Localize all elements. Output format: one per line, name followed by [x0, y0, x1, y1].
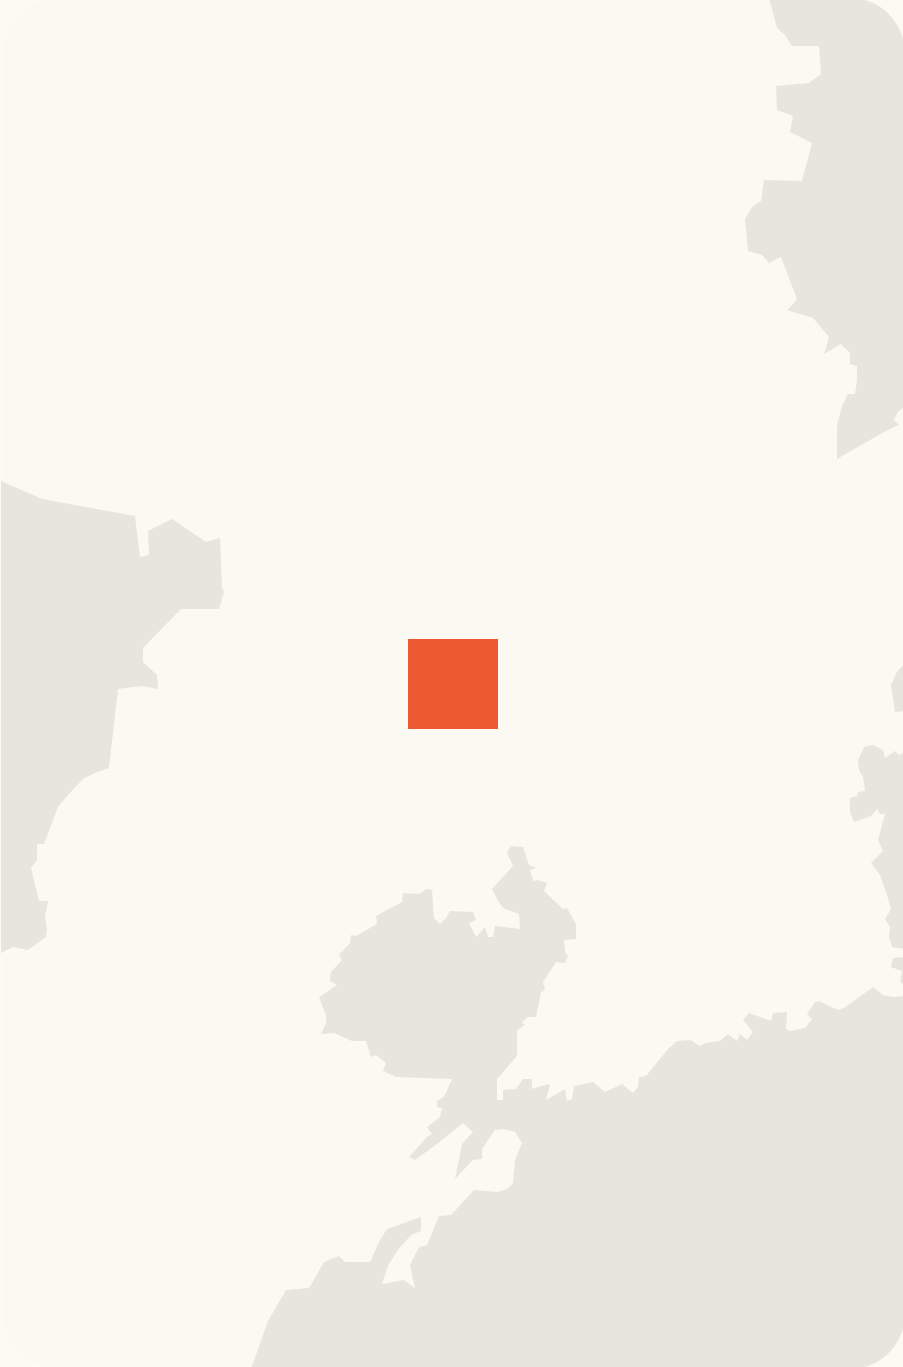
land: left	[1, 481, 224, 953]
land: top right	[745, 0, 903, 459]
land: right edge small coast	[891, 957, 903, 985]
location marker square	[408, 639, 498, 729]
land: right edge coast	[850, 745, 903, 949]
land: right edge island	[891, 663, 903, 712]
land: south coast and central peninsula	[251, 846, 903, 1367]
